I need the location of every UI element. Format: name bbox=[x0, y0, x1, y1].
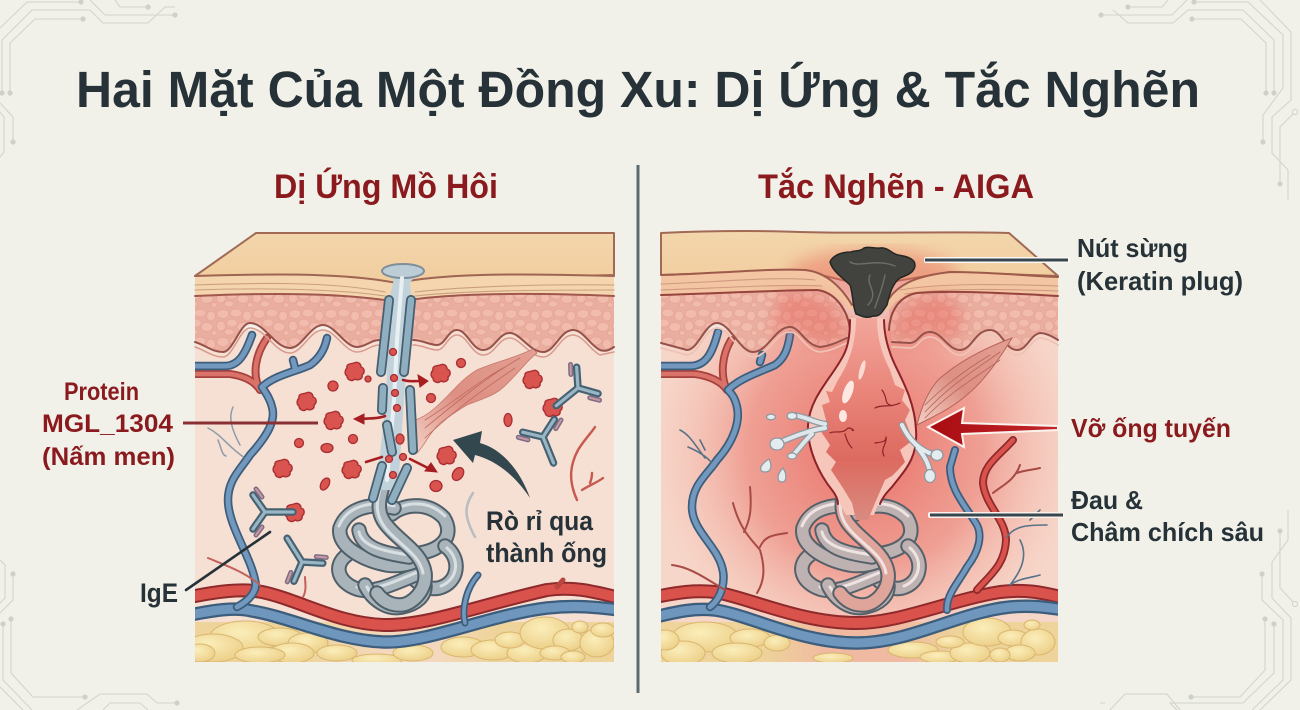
callout: IgE bbox=[140, 532, 270, 608]
branching vessels bbox=[655, 332, 1047, 610]
artery bbox=[190, 589, 620, 625]
epidermis band bbox=[195, 274, 614, 302]
center divider bbox=[636, 165, 640, 693]
cell layer bbox=[661, 290, 1058, 352]
MGL_1304 protein particles bbox=[273, 348, 562, 521]
skin top surface bbox=[661, 231, 1058, 286]
heading: left panel: Dị Ứng Mồ Hôi bbox=[274, 168, 498, 206]
ruptured duct bbox=[808, 318, 916, 520]
rupture arrow bbox=[928, 408, 1058, 447]
sweat gland coil bbox=[339, 483, 456, 608]
vein bbox=[190, 607, 620, 642]
callout: keratin plug: Nút sừng bbox=[1077, 233, 1188, 263]
callout: deep stinging pain: Đau & bbox=[1071, 485, 1143, 515]
callout: IgE: IgE bbox=[140, 578, 178, 608]
callout: leak through duct wall: thành ống bbox=[486, 538, 607, 568]
sweat gland coil bbox=[802, 483, 919, 608]
keratin plug bbox=[830, 247, 915, 317]
fat layer bbox=[183, 617, 615, 666]
dermis bbox=[661, 330, 1058, 622]
fat layer bbox=[651, 618, 1058, 665]
callout: keratin plug: (Keratin plug) bbox=[1077, 266, 1243, 296]
branching vessels bbox=[190, 335, 603, 623]
vein bbox=[655, 606, 1065, 643]
panel: AIGA blocked duct skin cross-section bbox=[650, 231, 1080, 665]
leaking fluid splashes bbox=[761, 412, 943, 482]
artery bbox=[655, 591, 1065, 623]
redness around plug bbox=[788, 249, 958, 301]
sweat duct bbox=[373, 264, 424, 500]
antibodies IgE bbox=[253, 363, 602, 584]
callout: leak through duct wall bbox=[486, 506, 607, 568]
callout: Protein MGL_1304 bbox=[42, 378, 318, 471]
muscle bbox=[917, 338, 1012, 425]
cell layer bbox=[195, 294, 614, 352]
inflammation glow bbox=[676, 278, 1054, 622]
callout: leak through duct wall: Rò rỉ qua bbox=[486, 506, 594, 536]
callout: Protein MGL_1304: MGL_1304 bbox=[42, 410, 173, 438]
callout: deep stinging pain: Châm chích sâu bbox=[1071, 517, 1264, 547]
curved leak arrow bbox=[453, 431, 530, 498]
leak arrows bbox=[354, 375, 437, 472]
skin top surface bbox=[195, 233, 614, 283]
title: Hai Mặt Của Một Đồng Xu: Dị Ứng & Tắc Nghẽn bbox=[76, 60, 1200, 118]
epidermis band bbox=[661, 270, 1058, 310]
callout: deep stinging pain bbox=[928, 485, 1264, 547]
callout: keratin plug bbox=[924, 233, 1243, 296]
callout: Protein MGL_1304: Protein bbox=[64, 378, 139, 406]
dermis bbox=[195, 330, 614, 622]
callout: duct rupture: Vỡ ống tuyến bbox=[1071, 413, 1231, 443]
callout: Protein MGL_1304: (Nấm men) bbox=[42, 443, 175, 471]
muscle bbox=[415, 349, 537, 453]
heading: right panel: Tắc Nghẽn - AIGA bbox=[758, 168, 1034, 206]
panel: sweat allergy skin cross-section bbox=[183, 233, 620, 666]
